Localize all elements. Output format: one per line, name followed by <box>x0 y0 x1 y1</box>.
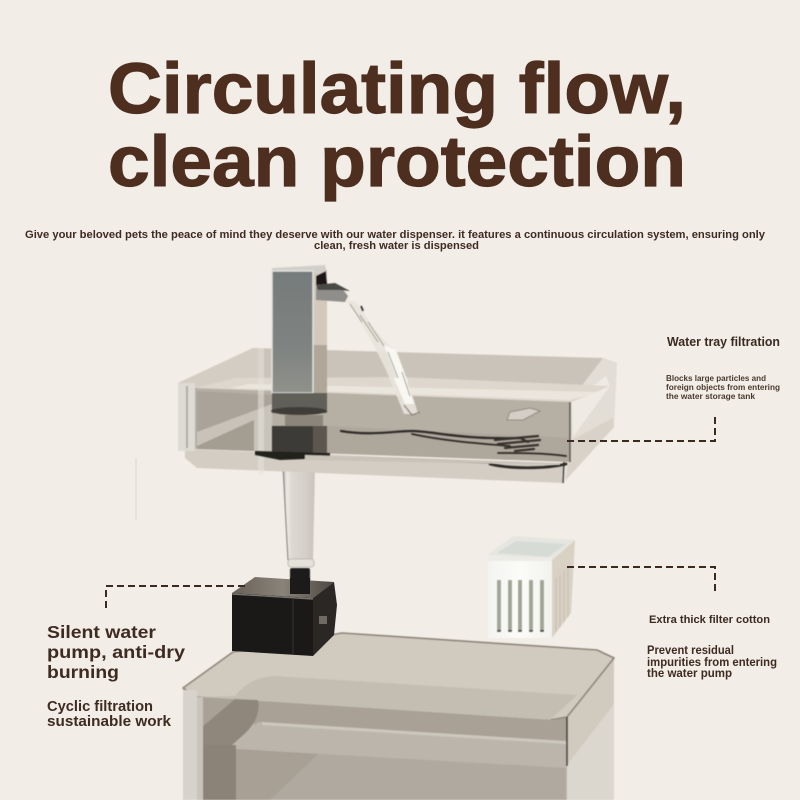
tray front face <box>195 388 570 462</box>
filter top <box>487 536 575 560</box>
text: filter description: impurities from entering <box>647 657 777 669</box>
text: cyclic filtration: Cyclic filtration <box>47 699 153 715</box>
label: silent water pump: burning <box>47 662 119 682</box>
label: extra thick filter cotton: Extra thick filter cotton <box>649 614 770 626</box>
text: filter description: the water pump <box>647 668 732 680</box>
tray left edge strip <box>178 383 195 451</box>
title: clean protection <box>108 123 686 202</box>
text: water tray description: Blocks large particles and <box>666 374 766 383</box>
tray vertical highlight <box>258 348 264 474</box>
callout: water tray leader <box>567 413 715 441</box>
faucet opening <box>316 271 327 285</box>
faucet column <box>272 271 313 393</box>
water pump <box>232 577 337 656</box>
subtitle text block <box>25 229 766 252</box>
water stream <box>346 300 420 415</box>
tray right side <box>563 358 617 483</box>
label: silent water pump: pump, anti-dry <box>47 642 185 662</box>
text: cyclic filtration: sustainable work <box>47 714 172 730</box>
pump tube <box>283 466 315 594</box>
label: silent water pump <box>47 622 185 682</box>
text: filter description <box>647 645 777 680</box>
faucet spout <box>316 286 348 302</box>
submerged column <box>272 393 327 413</box>
filter slots <box>497 580 544 630</box>
text: water tray description: foreign objects from entering <box>666 383 780 392</box>
tank water body <box>236 749 566 800</box>
tray back wall <box>178 348 617 402</box>
label: silent water pump: Silent water <box>47 622 156 642</box>
label: water tray filtration: Water tray filtration <box>667 335 780 349</box>
faucet <box>255 265 560 465</box>
tray left wall <box>178 348 258 388</box>
filter cartridge <box>487 536 575 638</box>
water tank <box>183 633 614 800</box>
tank top rim <box>183 633 614 720</box>
title: Circulating flow, <box>108 50 686 129</box>
tank left dark strip <box>203 745 236 800</box>
tank inner back wall <box>197 676 577 720</box>
pump front <box>232 593 313 656</box>
tray water surface <box>195 377 610 402</box>
tank water band <box>197 697 567 742</box>
pump side <box>313 582 337 656</box>
callout: filter leader <box>567 567 715 595</box>
title <box>108 50 686 202</box>
filter side face <box>552 540 575 638</box>
filter front face <box>488 557 552 638</box>
tray right edge <box>569 402 571 462</box>
text: water tray description: the water storage tank <box>666 392 756 401</box>
subtitle text block: clean, fresh water is dispensed <box>314 240 479 252</box>
water tray <box>178 348 617 483</box>
faucet cap <box>272 265 327 278</box>
pump top <box>232 577 334 598</box>
text: cyclic filtration <box>47 699 172 730</box>
tray lower skirt <box>185 449 563 483</box>
callout: pump leader <box>106 586 245 612</box>
text: water tray description <box>666 374 780 401</box>
text: filter description: Prevent residual <box>647 645 734 657</box>
tank front face <box>183 688 567 800</box>
subtitle text block: Give your beloved pets the peace of mind they deserve with our water dispenser. it features a continuous circulation system, ensuring only <box>25 229 766 241</box>
faucet base plate <box>255 451 330 460</box>
tray water streaks <box>340 431 566 468</box>
faucet back panel <box>313 270 327 394</box>
tank right side face <box>567 658 614 800</box>
